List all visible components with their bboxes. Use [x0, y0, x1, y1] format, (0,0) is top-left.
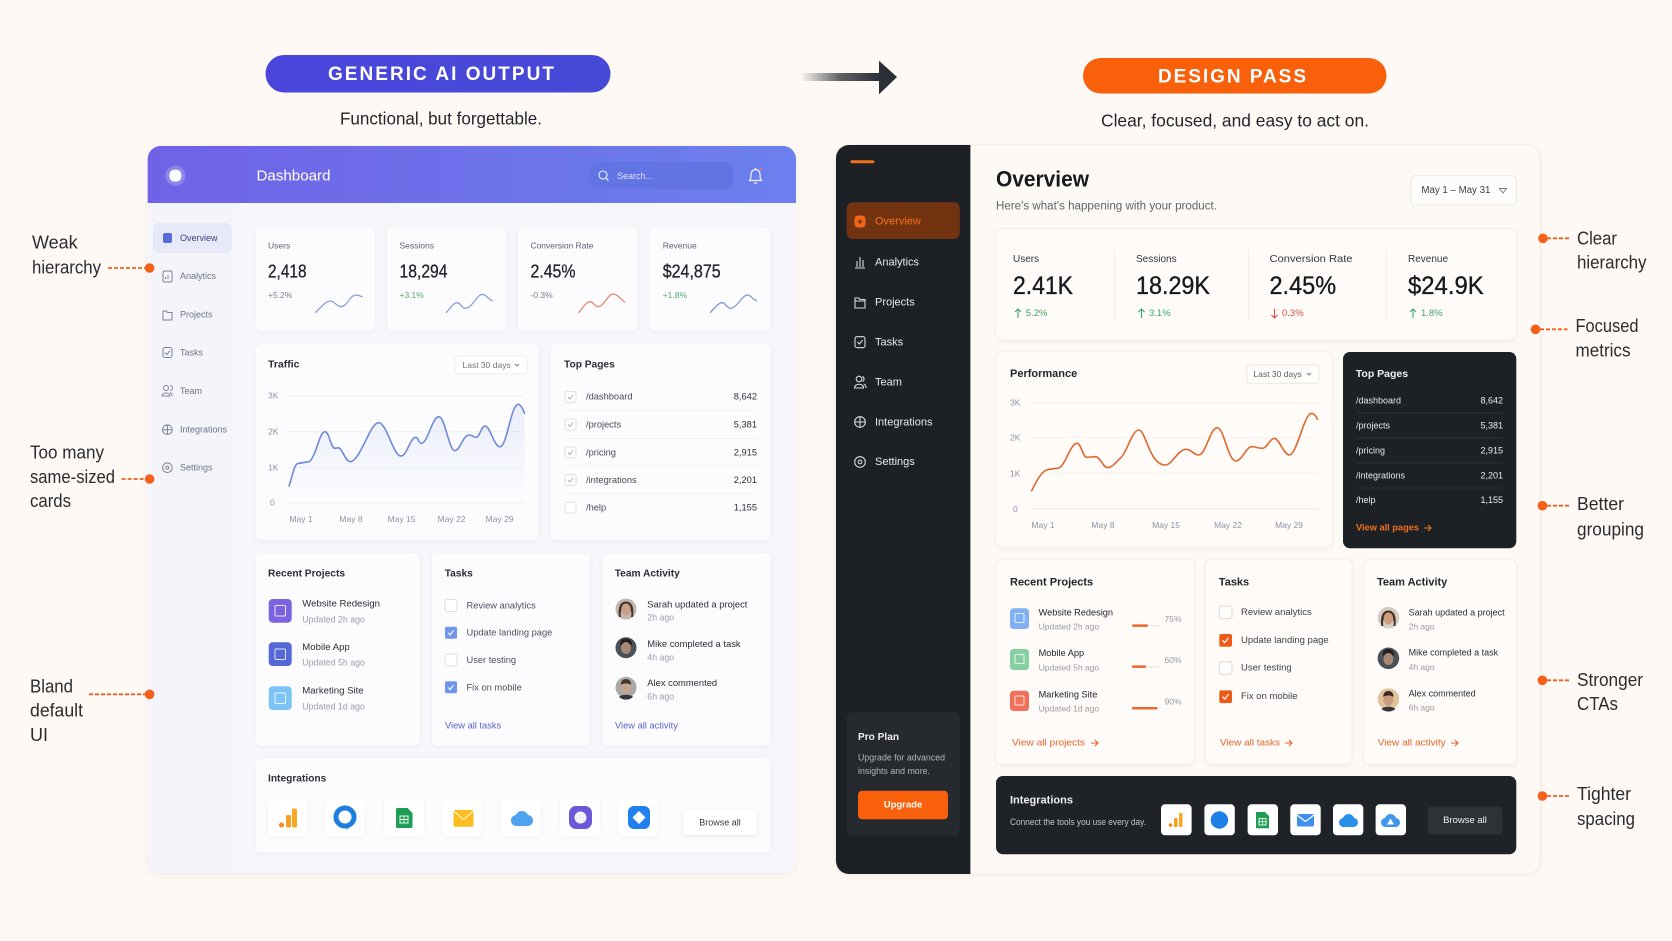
- icon: blue circle: [1204, 804, 1235, 835]
- stat card: sessions: 18,294: [400, 262, 448, 282]
- row: integrations: /integrations: [586, 475, 637, 485]
- card: tasks: [432, 553, 590, 746]
- dark card: integrations: [996, 776, 1516, 854]
- metric: conversion rate: 2.45%: [1270, 272, 1336, 300]
- row: help: 1,155: [734, 502, 757, 512]
- task: review analytics: [1219, 606, 1312, 619]
- card: pro plan: insights and more.: [858, 766, 930, 776]
- nav: settings: [855, 456, 915, 468]
- callout: stronger CTAs: [1538, 670, 1643, 714]
- activity: mike: Mike completed a task: [1409, 648, 1499, 658]
- card: team activity: [602, 553, 771, 746]
- nav: overview active: [153, 223, 232, 253]
- activity: alex: Alex commented: [1409, 688, 1476, 698]
- button: browse all: [1428, 807, 1502, 834]
- nav: overview active: Overview: [875, 216, 921, 228]
- icon: blue diamond: [618, 798, 658, 837]
- callout: better grouping: Better: [1577, 494, 1624, 514]
- callout: bland default UI: Bland: [30, 677, 73, 697]
- callout: stronger CTAs: CTAs: [1577, 694, 1618, 714]
- chart card: performance: Performance: [1010, 368, 1077, 380]
- task: user testing: User testing: [466, 655, 516, 665]
- task: review analytics: Review analytics: [466, 600, 536, 610]
- project: mobile app: 60%: [1164, 655, 1182, 665]
- header bar: [148, 146, 796, 203]
- task: review analytics: [445, 600, 536, 612]
- row: pricing: [565, 447, 757, 458]
- task: update landing page: Update landing page: [466, 628, 552, 638]
- activity: mike: Mike completed a task: [647, 638, 741, 649]
- activity: alex: Alex commented: [647, 677, 717, 688]
- row: integrations: [565, 474, 757, 486]
- task: review analytics: Review analytics: [1241, 607, 1312, 618]
- callout: weak hierarchy: Weak: [32, 233, 79, 253]
- page subheading: Here's what's happening with your product.: [996, 201, 1217, 213]
- stat card: users: 2,418: [268, 262, 306, 282]
- card: recent projects: [255, 553, 420, 746]
- stat card: revenue: Revenue: [663, 241, 697, 251]
- chart card: traffic: Traffic: [268, 359, 300, 371]
- icon: purple circle: [560, 798, 600, 837]
- row: dashboard: [565, 392, 757, 402]
- stat card: users: Users: [268, 241, 290, 251]
- chart card: traffic: [255, 344, 539, 540]
- callout: better grouping: grouping: [1577, 519, 1644, 539]
- search box: Search...: [617, 171, 653, 181]
- project: mobile app: Updated 5h ago: [302, 658, 365, 668]
- row: pricing: 2,915: [1480, 446, 1503, 456]
- row: projects: 5,381: [1480, 421, 1503, 431]
- activity: alex: 6h ago: [1409, 703, 1435, 713]
- icon: cloud: [501, 798, 541, 837]
- link: view all activity: View all activity: [615, 721, 678, 731]
- subtitle: functional but forgettable: Functional, but forgettable.: [340, 108, 542, 128]
- callout: too many same-sized cards: cards: [30, 491, 71, 511]
- task: update landing page: [1219, 634, 1329, 647]
- badge: generic AI output: [266, 55, 610, 92]
- chart card: traffic: May 15: [388, 514, 416, 524]
- stat card: sessions: +3.1%: [400, 290, 424, 300]
- date picker: May 1 – May 31: [1421, 185, 1490, 196]
- button: browse all: Browse all: [1443, 815, 1487, 826]
- row: dashboard: 8,642: [1480, 396, 1503, 406]
- callout: too many same-sized cards: [30, 442, 154, 511]
- chart card: performance: May 8: [1091, 520, 1115, 530]
- list card: top pages: [551, 344, 771, 540]
- metrics card: [996, 229, 1516, 340]
- nav: analytics: Analytics: [180, 271, 217, 281]
- icon: drive: [1376, 804, 1406, 835]
- project: mobile app: Mobile App: [1039, 648, 1084, 658]
- metric: conversion rate: [1270, 254, 1353, 319]
- task: user testing: User testing: [1241, 662, 1292, 674]
- chart card: traffic: 1K: [268, 462, 279, 472]
- task: user testing: [1219, 662, 1292, 674]
- row: pricing: 2,915: [734, 447, 757, 457]
- badge: generic AI output: GENERIC AI OUTPUT: [328, 64, 554, 85]
- project: marketing site: Updated 1d ago: [1039, 704, 1099, 714]
- row: dashboard: /dashboard: [586, 392, 633, 402]
- metric: users: Users: [1013, 254, 1039, 265]
- nav: settings: Settings: [875, 456, 915, 468]
- task: fix on mobile: [445, 681, 522, 693]
- sidebar: [148, 203, 238, 872]
- activity: sarah: 2h ago: [647, 613, 674, 623]
- dropdown: last 30 days: [1247, 365, 1319, 383]
- metric: conversion rate: Conversion Rate: [1270, 254, 1353, 265]
- metric: sessions: 3.1%: [1149, 308, 1171, 319]
- chart card: traffic: May 29: [486, 514, 514, 524]
- accent bar: [850, 160, 874, 163]
- row: projects: 5,381: [734, 419, 757, 429]
- activity: mike: [616, 637, 741, 662]
- card: pro plan: [847, 712, 960, 836]
- stat card: sessions: [387, 228, 506, 331]
- task: fix on mobile: [1219, 690, 1298, 703]
- card: tasks: Tasks: [445, 568, 473, 580]
- nav: overview active: Overview: [180, 233, 218, 243]
- nav: team: Team: [875, 376, 902, 388]
- dark sidebar: [836, 145, 970, 874]
- panel: redesigned dashboard: [836, 145, 1540, 874]
- search box: [589, 162, 733, 189]
- card: team activity: [1364, 559, 1516, 764]
- activity: mike: 4h ago: [1409, 662, 1435, 672]
- page heading: Overview: [996, 166, 1090, 192]
- metric: revenue: Revenue: [1408, 254, 1448, 265]
- nav: analytics: [163, 271, 217, 282]
- project: website redesign: Updated 2h ago: [1039, 621, 1099, 631]
- arrow: before to after: [800, 61, 897, 94]
- nav: overview active: [847, 202, 960, 239]
- stat card: conversion rate: -0.3%: [530, 290, 553, 300]
- link: view all pages: View all pages: [1356, 523, 1419, 533]
- callout: better grouping: [1538, 494, 1644, 539]
- nav: integrations: Integrations: [875, 416, 933, 428]
- link: view all activity: View all activity: [1378, 738, 1446, 748]
- dark card: integrations: Connect the tools you use every day.: [1010, 817, 1146, 827]
- row: help: 1,155: [1480, 495, 1503, 505]
- row: help: [1356, 495, 1503, 505]
- row: help: /help: [1356, 495, 1376, 505]
- row: pricing: [1356, 446, 1503, 456]
- nav: projects: [163, 310, 213, 320]
- card: tasks: Tasks: [1219, 576, 1249, 588]
- row: dashboard: [1356, 396, 1503, 406]
- subtitle: clear focused: Clear, focused, and easy to act on.: [1101, 110, 1369, 130]
- date picker: [1411, 176, 1516, 205]
- project: mobile app: Updated 5h ago: [1039, 663, 1099, 673]
- project: marketing site: 90%: [1164, 697, 1182, 707]
- project: marketing site: Marketing Site: [302, 686, 364, 696]
- card: tasks: [1206, 559, 1352, 764]
- stat card: conversion rate: Conversion Rate: [530, 241, 594, 251]
- icon: mail: [1290, 804, 1321, 835]
- callout: tighter spacing: [1538, 784, 1635, 829]
- chart card: performance: 1K: [1010, 468, 1021, 478]
- metric: revenue: $24.9K: [1408, 272, 1484, 300]
- row: projects: /projects: [1356, 421, 1391, 431]
- icon: analytics bars: [268, 798, 307, 837]
- chart card: traffic: 2K: [268, 427, 279, 437]
- callout: stronger CTAs: Stronger: [1577, 670, 1643, 690]
- project: mobile app: [1010, 648, 1182, 673]
- dropdown: last 30 days: Last 30 days: [1254, 369, 1302, 379]
- chart card: performance: May 29: [1275, 520, 1303, 530]
- nav: settings: Settings: [180, 463, 213, 473]
- row: dashboard: 8,642: [734, 392, 757, 402]
- link: view all tasks: View all tasks: [445, 721, 502, 731]
- callout: tighter spacing: spacing: [1577, 809, 1635, 829]
- dark card: top pages: Top Pages: [1356, 368, 1408, 380]
- stat card: revenue: [649, 228, 771, 331]
- button: browse all: [684, 810, 757, 835]
- task: user testing: [445, 654, 516, 666]
- metric: sessions: 18.29K: [1136, 272, 1210, 300]
- activity: sarah: [1378, 607, 1505, 631]
- chart card: traffic: May 22: [438, 514, 466, 524]
- nav: projects: Projects: [875, 297, 915, 309]
- nav: tasks: Tasks: [180, 348, 204, 358]
- row: dashboard: /dashboard: [1356, 396, 1401, 406]
- chart card: traffic: May 1: [289, 514, 313, 524]
- project: marketing site: Updated 1d ago: [302, 702, 365, 712]
- callout: too many same-sized cards: same-sized: [30, 467, 115, 487]
- activity: sarah: Sarah updated a project: [647, 598, 748, 610]
- icon: cloud: [1333, 804, 1363, 835]
- row: pricing: /pricing: [586, 447, 616, 457]
- chart card: traffic: 3K: [268, 391, 279, 401]
- metric: conversion rate: 0.3%: [1282, 308, 1304, 319]
- card: pro plan: Upgrade for advanced: [858, 752, 945, 762]
- callout: focused metrics: [1531, 316, 1638, 361]
- card: team activity: Team Activity: [615, 568, 680, 580]
- list card: top pages: Top Pages: [564, 360, 615, 370]
- row: projects: /projects: [586, 419, 621, 429]
- nav: tasks: Tasks: [875, 336, 904, 348]
- project: mobile app: [269, 642, 365, 668]
- activity: mike: [1378, 648, 1499, 672]
- chart card: performance: May 22: [1214, 520, 1242, 530]
- metric: sessions: Sessions: [1136, 254, 1177, 265]
- row: help: /help: [586, 502, 606, 512]
- activity: alex: [616, 677, 717, 702]
- icon: mail: [442, 798, 482, 837]
- header title: Dashboard: [256, 168, 330, 184]
- callout: bland default UI: [30, 677, 154, 745]
- card: team activity: Team Activity: [1377, 576, 1448, 588]
- nav: team: Team: [180, 386, 202, 396]
- callout: bland default UI: default: [30, 701, 83, 721]
- metric: users: 5.2%: [1026, 308, 1048, 319]
- metric: users: 2.41K: [1013, 272, 1073, 300]
- project: website redesign: Updated 2h ago: [302, 614, 365, 624]
- callout: weak hierarchy: hierarchy: [32, 258, 101, 278]
- project: website redesign: [1010, 607, 1182, 631]
- link: view all projects: View all projects: [1012, 738, 1085, 748]
- task: update landing page: Update landing page: [1241, 635, 1329, 646]
- row: pricing: /pricing: [1356, 446, 1385, 456]
- project: website redesign: [269, 598, 380, 624]
- row: projects: [565, 419, 757, 430]
- button: browse all: Browse all: [699, 818, 741, 828]
- project: mobile app: Mobile App: [302, 642, 350, 653]
- icon: sheets: [1248, 804, 1278, 835]
- card: pro plan: Pro Plan: [858, 731, 899, 743]
- stat card: sessions: Sessions: [400, 241, 434, 251]
- card: integrations: [255, 758, 771, 853]
- row: integrations: 2,201: [1480, 471, 1503, 481]
- chart card: performance: [996, 352, 1332, 548]
- nav: settings: [163, 463, 213, 473]
- chart card: performance: May 15: [1152, 520, 1180, 530]
- callout: clear hierarchy: hierarchy: [1577, 253, 1646, 273]
- icon: analytics bars: [1161, 804, 1192, 835]
- icon: chat ring: [325, 798, 365, 837]
- icon: sheets: [384, 798, 424, 837]
- row: integrations: 2,201: [734, 475, 757, 485]
- line chart: performance: [1032, 413, 1318, 491]
- stat card: users: [255, 228, 375, 331]
- chart card: traffic: May 8: [339, 514, 363, 524]
- nav: integrations: Integrations: [180, 425, 228, 435]
- metric: users: [1013, 254, 1073, 319]
- stat card: users: +5.2%: [268, 290, 293, 300]
- callout: too many same-sized cards: Too many: [30, 442, 104, 462]
- card: recent projects: Recent Projects: [268, 568, 345, 580]
- card: integrations: Integrations: [268, 774, 327, 784]
- project: website redesign: 75%: [1164, 614, 1182, 624]
- chart card: performance: May 1: [1031, 520, 1055, 530]
- dark card: top pages: [1343, 352, 1516, 548]
- stat card: revenue: +1.8%: [663, 290, 687, 300]
- activity: alex: 6h ago: [647, 692, 674, 702]
- project: marketing site: [1010, 689, 1182, 714]
- project: marketing site: [269, 686, 365, 712]
- activity: sarah: [616, 598, 748, 623]
- dropdown: last 30 days: Last 30 days: [462, 360, 511, 370]
- metric: sessions: [1136, 254, 1210, 319]
- card: recent projects: Recent Projects: [1010, 576, 1093, 588]
- badge: design pass: DESIGN PASS: [1158, 66, 1306, 87]
- panel: generic dashboard: [148, 146, 796, 873]
- stat card: revenue: $24,875: [663, 262, 721, 282]
- task: update landing page: [445, 627, 552, 639]
- nav: analytics: [855, 257, 920, 269]
- nav: tasks: [163, 348, 204, 358]
- callout: weak hierarchy: [32, 233, 154, 278]
- project: website redesign: Website Redesign: [302, 598, 380, 610]
- badge: design pass: [1083, 58, 1386, 94]
- callout: tighter spacing: Tighter: [1577, 784, 1631, 804]
- callout: clear hierarchy: [1538, 228, 1646, 273]
- chart card: performance: 3K: [1010, 398, 1021, 408]
- row: integrations: /integrations: [1356, 471, 1406, 481]
- logo: [165, 166, 185, 186]
- chart card: performance: 2K: [1010, 433, 1021, 443]
- project: website redesign: Website Redesign: [1039, 607, 1113, 617]
- nav: analytics: Analytics: [875, 257, 920, 269]
- nav: projects: [855, 297, 915, 309]
- callout: bland default UI: UI: [30, 725, 48, 745]
- activity: mike: 4h ago: [647, 652, 674, 662]
- callout: focused metrics: Focused: [1576, 316, 1638, 336]
- callout: focused metrics: metrics: [1576, 341, 1630, 361]
- project: marketing site: Marketing Site: [1039, 689, 1097, 699]
- stat card: conversion rate: [518, 228, 638, 331]
- dropdown: last 30 days: [455, 356, 527, 374]
- chart card: performance: 0: [1013, 504, 1018, 514]
- activity: sarah: Sarah updated a project: [1409, 607, 1505, 617]
- callout: clear hierarchy: Clear: [1577, 228, 1617, 248]
- link: view all tasks: View all tasks: [1220, 738, 1280, 748]
- nav: projects: Projects: [180, 310, 213, 320]
- task: fix on mobile: Fix on mobile: [466, 682, 522, 692]
- line chart: traffic: [289, 404, 525, 502]
- activity: alex: [1378, 688, 1476, 713]
- icon: bell: [750, 168, 762, 183]
- stat card: conversion rate: 2.45%: [530, 262, 576, 282]
- chart card: traffic: 0: [270, 498, 275, 508]
- task: fix on mobile: Fix on mobile: [1241, 691, 1298, 702]
- row: integrations: [1356, 471, 1503, 481]
- metric: revenue: [1408, 254, 1484, 319]
- metric: revenue: 1.8%: [1421, 308, 1443, 319]
- dark card: integrations: Integrations: [1010, 795, 1073, 807]
- nav: team: [854, 376, 902, 388]
- card: recent projects: [996, 559, 1194, 764]
- row: projects: [1356, 421, 1503, 431]
- activity: sarah: 2h ago: [1409, 621, 1435, 631]
- row: help: [565, 502, 757, 513]
- button: upgrade: Upgrade: [884, 800, 922, 810]
- nav: tasks: [855, 336, 904, 348]
- nav: team: [162, 386, 202, 396]
